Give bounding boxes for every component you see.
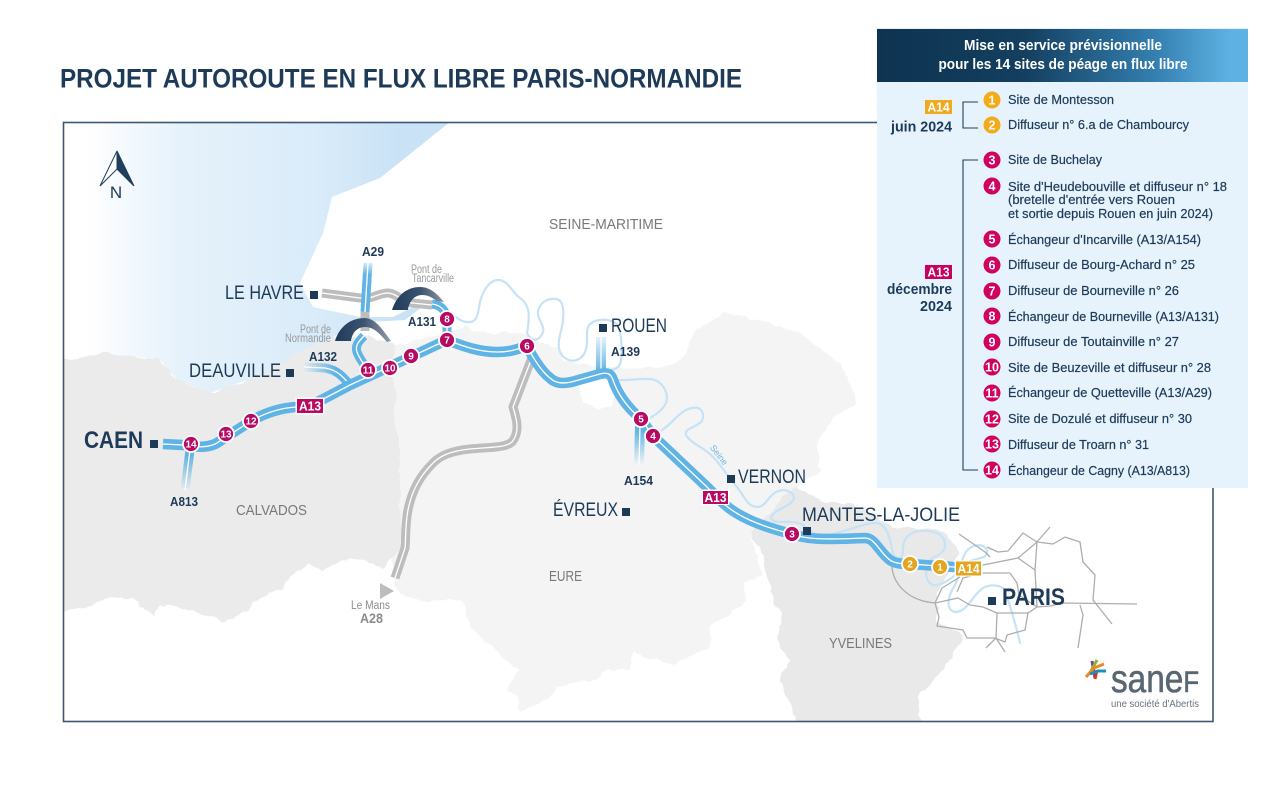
legend text: Site de Montesson — [1008, 92, 1114, 107]
map marker numbers: 12 — [245, 416, 257, 428]
logo: sanef: saneF — [1111, 658, 1199, 701]
road: A131 — [432, 304, 447, 340]
Paris road network — [892, 527, 1137, 652]
map marker numbers: 3 — [789, 530, 795, 540]
legend numbers: 8 — [989, 310, 996, 324]
map marker numbers: 11 — [363, 366, 374, 376]
legend numbers: 13 — [985, 438, 999, 452]
legend numbers: 3 — [989, 154, 996, 168]
legend numbers: 4 — [989, 180, 996, 194]
land and sea base — [55, 122, 963, 730]
label: A28: A28 — [360, 611, 383, 626]
map marker numbers: 6 — [524, 342, 530, 352]
A14 date group: juin 2024 — [890, 118, 953, 136]
logo: sanef: une société d'Abertis — [1111, 699, 1199, 710]
road labels: A139 — [611, 344, 640, 359]
department: Eure — [367, 313, 857, 712]
road: A813 — [185, 450, 190, 490]
department names: SEINE-MARITIME — [549, 217, 663, 233]
legend numbers: 7 — [989, 284, 996, 298]
logo mark — [1086, 660, 1106, 679]
road labels: A131 — [408, 314, 436, 329]
legend text: Diffuseur n° 6.a de Chambourcy — [1008, 117, 1189, 132]
A14 date group — [890, 100, 953, 136]
north arrow: N — [110, 183, 122, 202]
map marker numbers: 4 — [650, 432, 656, 442]
road: A132 — [304, 367, 351, 386]
legend numbers: 5 — [989, 232, 996, 246]
map frame — [64, 122, 1213, 722]
road shield: A13 west: A13 — [299, 398, 321, 414]
city: Le Havre: LE HAVRE — [225, 283, 304, 304]
logo: sanef — [1086, 658, 1199, 710]
legend text: Site de Dozulé et diffuseur n° 30 — [1008, 411, 1192, 426]
map marker numbers: 9 — [408, 352, 414, 362]
city: Caen: CAEN — [84, 427, 143, 454]
department names — [236, 217, 892, 652]
bracket: A14 — [963, 102, 978, 128]
legend numbers: 10 — [985, 360, 999, 374]
city: Evreux: ÉVREUX — [553, 500, 618, 521]
legend numbers: 11 — [985, 386, 999, 400]
city: Rouen — [599, 316, 667, 337]
road labels: A154 — [624, 473, 654, 488]
panel header — [877, 29, 1248, 82]
white enclave near Rouen — [578, 378, 614, 410]
legend text: (bretelle d'entrée vers Rouen — [1008, 192, 1175, 207]
arrow: A28 — [380, 583, 394, 599]
map marker numbers: 5 — [638, 414, 644, 426]
A13 date group: A13 — [928, 264, 950, 280]
city: Rouen: ROUEN — [611, 316, 667, 337]
legend text: Diffuseur de Troarn n° 31 — [1008, 437, 1149, 452]
road: A154 — [639, 425, 640, 465]
legend text: et sortie depuis Rouen en juin 2024) — [1008, 206, 1213, 221]
legend text: Site de Beuzeville et diffuseur n° 28 — [1008, 360, 1211, 375]
legend text: Échangeur de Cagny (A13/A813) — [1008, 463, 1190, 478]
label: Pont de Normandie: Pont de — [300, 324, 331, 336]
city: Mantes-la-Jolie — [802, 505, 960, 535]
road labels: A132 — [309, 349, 337, 364]
road: A13 and A14 main route — [163, 340, 968, 568]
legend numbers — [984, 92, 1000, 478]
department names: CALVADOS — [236, 503, 307, 519]
map — [55, 122, 1199, 730]
legend text: Site d'Heudebouville et diffuseur n° 18 — [1008, 179, 1227, 194]
A13 date group: 2024 — [920, 298, 953, 315]
legend text: Diffuseur de Bourg-Achard n° 25 — [1008, 257, 1195, 272]
department: Calvados — [55, 335, 405, 623]
label: Seine: Seine — [708, 443, 730, 467]
north arrow — [100, 151, 134, 202]
city: Paris: PARIS — [1002, 584, 1065, 611]
legend numbers: 12 — [985, 412, 999, 426]
label: Pont de Tancarville: Pont de — [411, 264, 442, 276]
legend numbers: 9 — [989, 336, 996, 350]
map marker numbers: 13 — [220, 430, 232, 440]
road: Le Havre grey link — [322, 293, 432, 305]
road: A29 — [356, 263, 368, 369]
road: A139 — [596, 337, 606, 372]
department names: EURE — [549, 569, 582, 585]
legend text: Diffuseur de Bourneville n° 26 — [1008, 283, 1179, 298]
legend numbers: 14 — [985, 464, 999, 478]
legend numbers: 2 — [989, 118, 996, 132]
road labels: A29 — [362, 244, 384, 259]
label: Pont de Normandie: Normandie — [285, 333, 331, 345]
legend text: Diffuseur de Toutainville n° 27 — [1008, 334, 1179, 349]
legend text: Site de Buchelay — [1008, 152, 1102, 167]
legend text: Échangeur de Bourneville (A13/A131) — [1008, 309, 1219, 324]
map marker numbers: 7 — [444, 336, 450, 346]
A13 date group — [887, 264, 953, 315]
title: PROJET AUTOROUTE EN FLUX LIBRE PARIS-NORMANDIE — [60, 64, 742, 94]
department: Yvelines — [750, 487, 963, 730]
legend text: Échangeur de Quetteville (A13/A29) — [1008, 385, 1212, 400]
panel header: Mise en service prévisionnelle — [964, 38, 1162, 54]
label: Pont de Tancarville: Tancarville — [412, 273, 454, 285]
legend text — [1008, 92, 1227, 478]
map marker numbers: 14 — [185, 440, 197, 450]
map marker numbers: 1 — [937, 562, 943, 574]
bridge: Pont de Normandie — [335, 318, 391, 342]
sea and estuary — [116, 123, 448, 392]
city: Vernon: VERNON — [738, 467, 806, 488]
department names: YVELINES — [829, 636, 892, 652]
bracket: A13 — [963, 160, 978, 470]
map markers 1 to 14 — [183, 311, 948, 575]
road labels: A813 — [170, 494, 198, 509]
map marker numbers: 2 — [907, 560, 913, 570]
A14 date group: A14 — [928, 100, 950, 114]
map marker numbers: 8 — [444, 314, 450, 326]
label: Pont de Tancarville — [411, 264, 454, 285]
legend numbers: 6 — [989, 258, 996, 272]
label: Pont de Normandie — [285, 324, 331, 345]
legend text: Échangeur d'Incarville (A13/A154) — [1008, 232, 1201, 247]
road: A28 to Le Mans — [395, 355, 533, 578]
bridge: Pont de Tancarville — [392, 287, 444, 310]
panel header: pour les 14 sites de péage en flux libre — [938, 57, 1188, 73]
road shield: A13 east: A13 — [704, 490, 726, 505]
city: Deauville: DEAUVILLE — [189, 361, 281, 382]
city: Mantes-la-Jolie: MANTES-LA-JOLIE — [802, 505, 960, 526]
road labels — [170, 244, 654, 509]
panel: service schedule — [877, 28, 1248, 488]
label: Le Mans: Le Mans — [351, 600, 390, 612]
river Seine — [447, 280, 1020, 643]
map marker numbers — [185, 314, 943, 574]
map marker numbers: 10 — [384, 364, 396, 374]
road shield: A14: A14 — [958, 561, 980, 576]
legend numbers: 1 — [989, 94, 996, 108]
A13 date group: décembre — [887, 281, 952, 298]
